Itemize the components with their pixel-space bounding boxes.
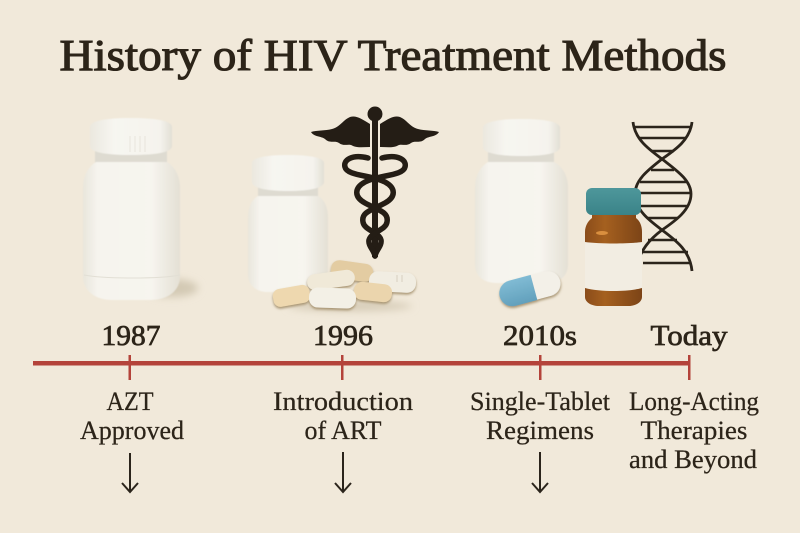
label: Single-Tablet Regimens: Single-Tablet: [470, 387, 611, 416]
icon: caduceus: [311, 106, 439, 257]
icon: capsule: [496, 268, 563, 309]
label: Long-Acting Therapies and Beyond: Long-Acting: [629, 387, 759, 416]
label: AZT Approved: Approved: [80, 416, 184, 445]
icon: third white pill bottle: [475, 119, 568, 283]
icon: DNA helix: [633, 122, 692, 271]
arrow: below Single-Tablet Regimens: [532, 452, 548, 492]
year: Today: Today: [650, 320, 728, 352]
label: Long-Acting Therapies and Beyond: [629, 387, 759, 474]
label: AZT Approved: [80, 387, 184, 445]
year: 1987: 1987: [102, 320, 160, 352]
label: AZT Approved: AZT: [106, 387, 154, 416]
label: Long-Acting Therapies and Beyond: and Beyond: [629, 445, 757, 474]
label: Introduction of ART: of ART: [304, 416, 382, 445]
label: Introduction of ART: [273, 387, 413, 445]
icon: amber vial: [585, 188, 642, 306]
title: History of HIV Treatment Methods: [60, 31, 726, 80]
arrow: below AZT: [122, 453, 138, 492]
label: Long-Acting Therapies and Beyond: Therapies: [640, 416, 748, 445]
icon: large white pill bottle: [83, 118, 198, 300]
label: Introduction of ART: Introduction: [273, 387, 413, 416]
label: Single-Tablet Regimens: [470, 387, 611, 445]
label: Single-Tablet Regimens: Regimens: [486, 416, 594, 445]
icon: medium white pill bottle: [248, 155, 328, 292]
timeline: [33, 355, 690, 380]
year: 2010s: 2010s: [503, 320, 577, 352]
year: 1996: 1996: [313, 320, 373, 352]
arrow: below ART: [335, 452, 351, 492]
icon: pile of tablets: [272, 259, 416, 311]
